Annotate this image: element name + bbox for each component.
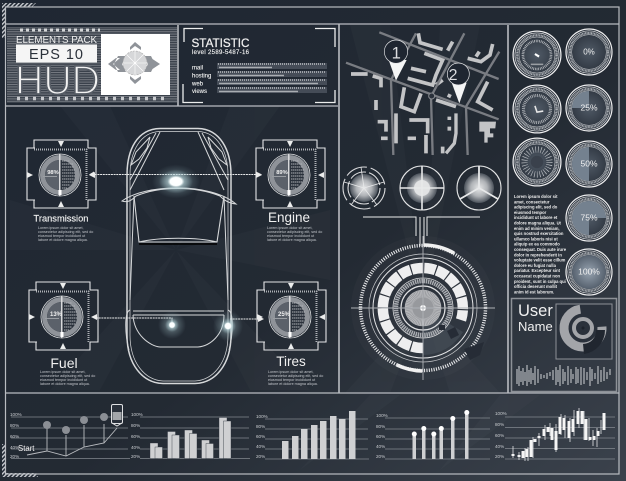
axis labels: 40%: [376, 444, 385, 449]
text column: Lorem ipsum dolor sit: [514, 194, 558, 199]
glow: front light: [152, 164, 200, 198]
statistic heading: STATISTIC: [192, 36, 250, 50]
gauge: 25%: [566, 85, 612, 131]
map pin 2: [447, 63, 469, 103]
text: tires description: consectetur adipiscing elit, sed do: [268, 374, 323, 378]
statistic bars: [217, 63, 327, 93]
gauge: 100%: [566, 249, 612, 295]
white arc bottom: [397, 365, 422, 371]
glow: rear light left: [158, 311, 186, 339]
text: transmission description: consectetur adipiscing elit, sed do: [38, 230, 93, 234]
gauge: 75%: 75%: [580, 213, 598, 223]
label: tires: Tires: [276, 354, 306, 369]
axis labels: [256, 414, 268, 459]
axis labels: 40%: [256, 444, 265, 449]
fuel icon: [112, 404, 122, 426]
gauge: 75%: [566, 195, 612, 241]
pie: four segments: [400, 166, 444, 210]
arrows logo: [108, 42, 160, 84]
radar dial: [351, 236, 495, 380]
map pin 1: 1: [392, 43, 401, 62]
lollipop heads: [412, 410, 469, 436]
text column: eiusmod tempor: [514, 210, 547, 215]
pie: five segments: [343, 167, 385, 209]
text column: [514, 194, 567, 294]
car outline: [122, 128, 236, 384]
bars: [150, 418, 231, 458]
chart: route line: [10, 404, 130, 459]
text column: aliquip ex ea commodo: [514, 242, 560, 247]
axis labels: 60%: [131, 434, 140, 439]
text: engine description: eiusmod tempor incididunt ut: [267, 234, 314, 238]
user name heading: [518, 302, 553, 334]
corner brackets: [183, 28, 335, 102]
EPS label: [16, 44, 97, 63]
gauge: speed: [513, 31, 561, 79]
radar connector: [363, 217, 480, 246]
gauge: 100%: 100%: [578, 267, 600, 277]
crosshair: [351, 236, 495, 380]
text: transmission description: eiusmod tempor incididunt ut: [38, 234, 85, 238]
gauge: tachometer: [513, 85, 561, 133]
windshield: [122, 188, 236, 204]
text column: anim id est laborum.: [514, 289, 554, 294]
text column: enim ad minim veniam,: [514, 226, 560, 231]
axis labels: [10, 412, 22, 459]
user chart box: [556, 304, 612, 359]
text: tires description: labore et dolore magna aliqua.: [268, 382, 318, 386]
axis labels: 60%: [10, 434, 19, 439]
text column: dolor in reprehenderit in: [514, 252, 562, 257]
text: transmission description: labore et dolore magna aliqua.: [38, 238, 88, 242]
buildings: [351, 33, 496, 153]
widget: fuel: 13%: [50, 312, 63, 318]
white logo box: [101, 34, 170, 95]
gauge: 50%: [566, 141, 612, 187]
panel: user: [512, 298, 616, 392]
text: engine description: labore et dolore magna aliqua.: [267, 238, 317, 242]
axis labels: [495, 411, 507, 459]
widget: transmission: [27, 140, 96, 208]
axis labels: 100%: [495, 411, 507, 416]
user name heading: User: [518, 302, 553, 320]
row labels: hosting: [192, 74, 211, 80]
lollipop stems: [412, 413, 468, 459]
axis labels: 60%: [376, 434, 385, 439]
label: fuel: Fuel: [50, 355, 78, 371]
candle wicks: [513, 408, 601, 461]
widget: engine: 89%: [276, 170, 288, 176]
axis labels: 60%: [495, 433, 504, 438]
roads: [346, 32, 499, 155]
chart: lollipops: [376, 410, 490, 459]
panel: elements pack badge: [7, 27, 177, 103]
text column: officia deserunt mollit: [514, 284, 558, 289]
row labels: web: [191, 82, 204, 88]
axis labels: 40%: [10, 445, 19, 450]
user name heading: Name: [518, 319, 553, 334]
lower right shade: [423, 308, 463, 355]
axis labels: [376, 413, 388, 459]
candle bodies: [513, 411, 604, 458]
text column: amet, consectetur: [514, 199, 550, 204]
text column: ullamco laboris nisi ut: [514, 236, 558, 241]
text column: quis nostrud exercitation: [514, 231, 564, 236]
axis labels: 20%: [131, 454, 140, 459]
text: fuel description: labore et dolore magna aliqua.: [40, 382, 90, 386]
gauge: 0%: 0%: [583, 48, 595, 56]
axis labels: 100%: [10, 412, 22, 417]
label: transmission: Transmission: [34, 214, 88, 224]
statistic subheading: level 2589-5487-16: [192, 50, 250, 56]
label: engine: Engine: [268, 210, 310, 225]
white arc top: [424, 245, 454, 253]
map pin 2: 2: [449, 67, 458, 84]
text: engine description: Lorem ipsum dolor sit amet,: [267, 226, 312, 230]
text column: proident, sunt in culpa qui: [514, 279, 566, 284]
gauge: compass: [513, 138, 561, 186]
hood lines: [130, 132, 228, 190]
text: engine description: consectetur adipiscing elit, sed do: [267, 230, 322, 234]
panel: statistic: [183, 28, 335, 102]
text: transmission description: Lorem ipsum dolor sit amet,: [38, 226, 84, 230]
axis labels: 20%: [376, 454, 385, 459]
city map: [346, 32, 499, 155]
text column: consequat. Duis aute irure: [514, 247, 567, 252]
axis labels: 100%: [256, 414, 268, 419]
cabin pillars: [134, 196, 224, 242]
axis labels: 40%: [495, 444, 504, 449]
bottom stripe accents: [17, 97, 165, 100]
text column: occaecat cupidatat non: [514, 274, 560, 278]
chart: double bars: [131, 412, 250, 459]
axis labels: 20%: [10, 454, 19, 459]
start label: Start: [18, 444, 35, 453]
text: tires description: [268, 370, 323, 386]
dark markers: [439, 325, 484, 360]
route pins: [43, 413, 108, 434]
axis labels: 20%: [256, 454, 265, 459]
axis labels: 40%: [131, 445, 140, 450]
HUD title: HUD: [15, 57, 100, 103]
gauge: 0%: [566, 29, 612, 75]
widget: transmission: 98%: [47, 170, 59, 176]
widget: engine: [256, 140, 325, 208]
widget: tires: [257, 282, 326, 350]
axis labels: 80%: [495, 422, 504, 427]
waveform: [517, 365, 610, 386]
axis labels: 100%: [131, 412, 143, 417]
text: fuel description: [40, 370, 95, 386]
rear window: [133, 311, 224, 347]
top stripe accents: [20, 28, 100, 32]
headlights: [131, 137, 227, 165]
segmented ring: [383, 268, 463, 348]
corner hatching: [2, 3, 38, 477]
axis labels: 80%: [10, 423, 19, 428]
axis labels: 80%: [256, 424, 265, 429]
row labels: [191, 66, 211, 95]
text: fuel description: Lorem ipsum dolor sit amet,: [40, 370, 86, 374]
axis labels: 80%: [376, 424, 385, 429]
connector: transmission to engine: [89, 172, 262, 178]
row labels: views: [192, 89, 207, 95]
bars: [282, 411, 356, 459]
text column: pariatur. Excepteur sint: [514, 268, 561, 273]
gauge: 50%: 50%: [580, 159, 598, 169]
widget: fuel: [29, 282, 98, 350]
text column: dolore eu fugiat nulla: [514, 263, 557, 268]
axis labels: 20%: [495, 454, 504, 459]
text column: adipiscing elit, sed do: [514, 205, 558, 210]
widget: tires: 25%: [278, 312, 291, 318]
text: engine description: [267, 226, 322, 242]
map pin 1: [384, 40, 408, 81]
connector: car light to tires: [230, 316, 264, 322]
heading: elements pack: ELEMENTS PACK: [16, 35, 97, 46]
axis labels: 60%: [256, 434, 265, 439]
chart: rising bars: [256, 411, 369, 459]
text column: dolore magna aliqua. Ut: [514, 220, 562, 226]
text: transmission description: [38, 226, 93, 242]
chart: candlesticks: [495, 408, 615, 461]
connector: fuel to car light: [96, 318, 172, 325]
gauge: 25%: 25%: [580, 103, 598, 113]
text: fuel description: consectetur adipiscing elit, sed do: [40, 374, 95, 378]
axis labels: [131, 412, 143, 459]
text: tires description: Lorem ipsum dolor sit amet,: [268, 370, 314, 374]
glow: rear light right: [213, 311, 243, 341]
background rays: [10, 25, 540, 470]
text column: voluptate velit esse cillum: [514, 258, 566, 263]
pie: three segments: [457, 166, 501, 210]
text: tires description: eiusmod tempor incididunt ut: [268, 378, 315, 382]
text: fuel description: eiusmod tempor incididunt ut: [40, 378, 87, 382]
axis labels: 100%: [376, 413, 388, 418]
road junction: [429, 93, 435, 99]
text column: incididunt ut labore et: [514, 215, 558, 220]
route polyline: [27, 424, 117, 456]
axis labels: 80%: [131, 423, 140, 428]
rear haunches: [126, 310, 232, 350]
EPS label: EPS 10: [29, 47, 83, 63]
row labels: mail: [192, 66, 203, 72]
